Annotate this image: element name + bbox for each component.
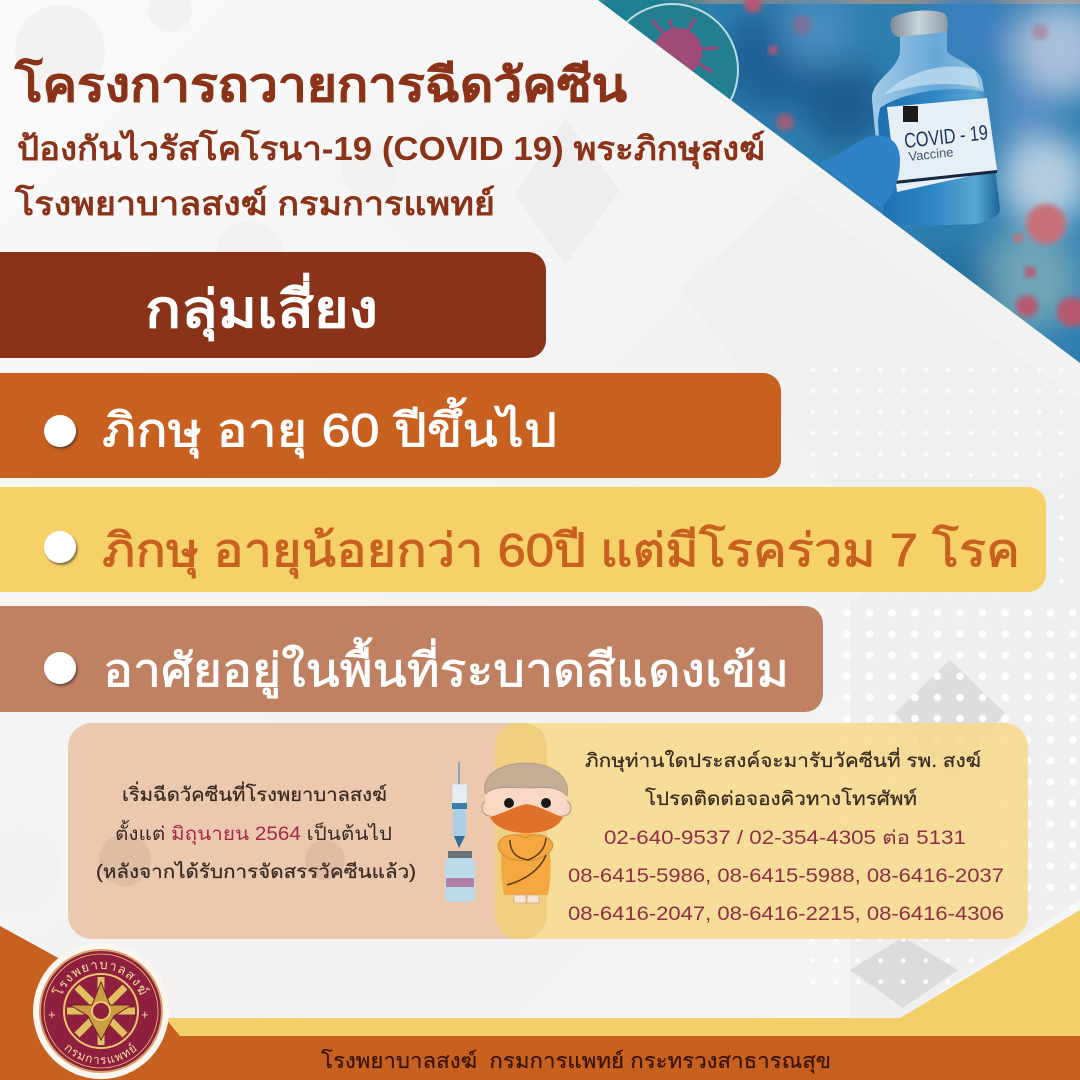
bullet	[44, 531, 76, 563]
vial label: Vaccine	[908, 144, 954, 164]
ears	[482, 800, 498, 816]
footer shapes	[0, 910, 1080, 1080]
head	[485, 763, 567, 833]
title line 3: โรงพยาบาลสงฆ์ กรมการแพทย์	[14, 184, 495, 222]
blurred viruses	[744, 0, 1080, 327]
contact text and highlight pill: 08-6415-5986, 08-6415-5988, 08-6416-2037	[568, 866, 1004, 887]
virus circle	[626, 3, 739, 100]
logo: hospital seal: +	[141, 1007, 149, 1022]
panel: vaccination start date: เริ่มฉีดวัคซีนที่โรงพยาบาลสงฆ์	[122, 781, 387, 806]
panel: booking contact	[500, 723, 1028, 939]
photo: covid-19 vaccine vial	[580, 0, 1080, 365]
bullet	[44, 652, 76, 684]
band: monks under 60 with 7 diseases	[0, 487, 1046, 592]
mask	[490, 804, 563, 833]
title line 2: ป้องกันไวรัสโคโรนา-19 (COVID 19) พระภิกษุสงฆ์	[17, 129, 765, 170]
logo: hospital seal: กรมการแพทย์	[64, 1042, 137, 1064]
panel: vaccination start date	[68, 723, 520, 939]
logo: hospital seal: +	[48, 1007, 56, 1022]
logo: hospital seal: โรงพยาบาลสงฆ์	[52, 962, 150, 996]
band: monks aged 60+	[0, 373, 781, 478]
title line 1: โครงการถวายการฉีดวัคซีน	[14, 57, 627, 111]
contact text and highlight pill: โปรดติดต่อจองคิวทางโทรศัพท์	[645, 787, 917, 810]
glove hand	[820, 136, 900, 208]
contact text and highlight pill: 08-6416-2047, 08-6416-2215, 08-6416-4306	[568, 904, 1004, 925]
panel: vaccination start date: ตั้งแต่ มิถุนายน 2564 เป็นต้นไป	[115, 820, 392, 846]
contact text and highlight pill	[495, 723, 1004, 939]
contact text and highlight pill: 02-640-9537 / 02-354-4305 ต่อ 5131	[604, 828, 966, 849]
logo: hospital seal	[33, 945, 169, 1079]
robe	[501, 833, 551, 895]
contact text and highlight pill: ภิกษุท่านใดประสงค์จะมารับวัคซีนที่ รพ. สงฆ์	[585, 747, 981, 773]
vial	[872, 11, 1000, 226]
eyes	[504, 798, 514, 808]
panel: vaccination start date: (หลังจากได้รับการจัดสรรวัคซีนแล้ว)	[96, 861, 416, 883]
band: living in dark-red zone	[0, 606, 823, 712]
bullet	[44, 415, 76, 447]
band: monks aged 60+: ภิกษุ อายุ 60 ปีขึ้นไป	[102, 397, 557, 459]
vial label	[887, 98, 997, 192]
icon: syringe and vial	[445, 762, 475, 902]
footer text: โรงพยาบาลสงฆ์ กรมการแพทย์ กระทรวงสาธารณสุข	[321, 1049, 831, 1074]
vial label: COVID - 19	[903, 121, 989, 153]
icon: monk wearing mask	[482, 763, 571, 903]
band: living in dark-red zone: อาศัยอยู่ในพื้นที่ระบาดสีแดงเข้ม	[103, 637, 789, 698]
title	[14, 57, 765, 222]
banner: at-risk heading	[0, 252, 546, 358]
band: monks under 60 with 7 diseases: ภิกษุ อายุน้อยกว่า 60ปี แต่มีโรคร่วม 7 โรค	[102, 524, 1020, 579]
banner: at-risk heading: กลุ่มเสี่ยง	[145, 273, 378, 342]
